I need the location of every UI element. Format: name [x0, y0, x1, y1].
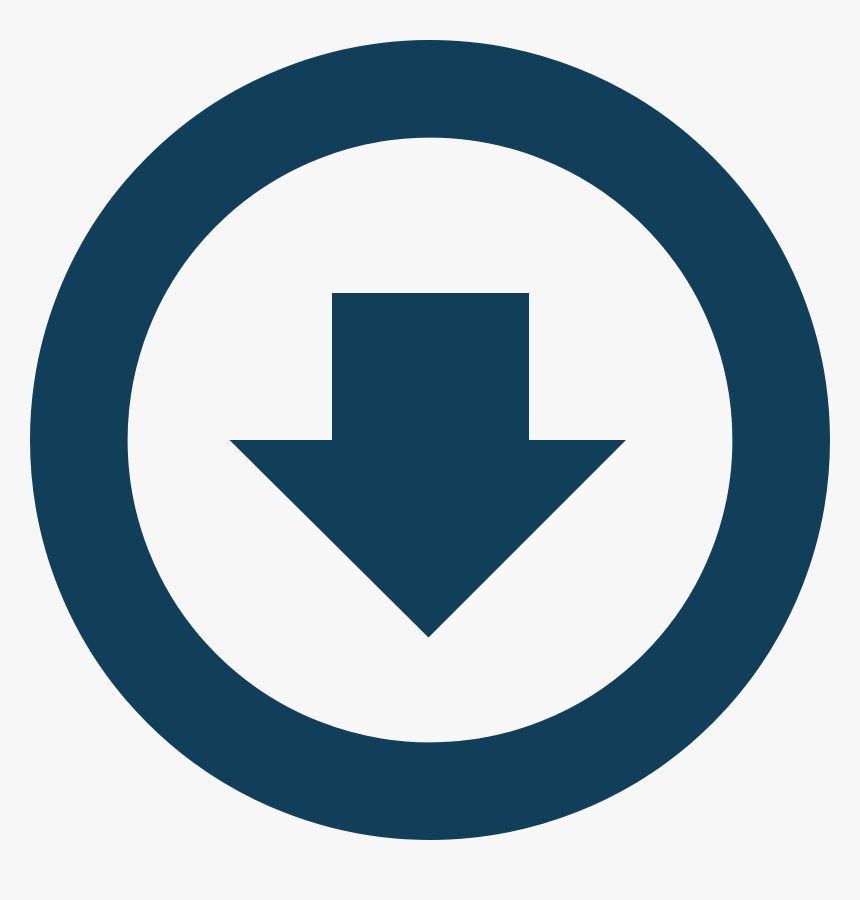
icon ring — [79, 89, 781, 791]
down arrow — [230, 293, 626, 638]
